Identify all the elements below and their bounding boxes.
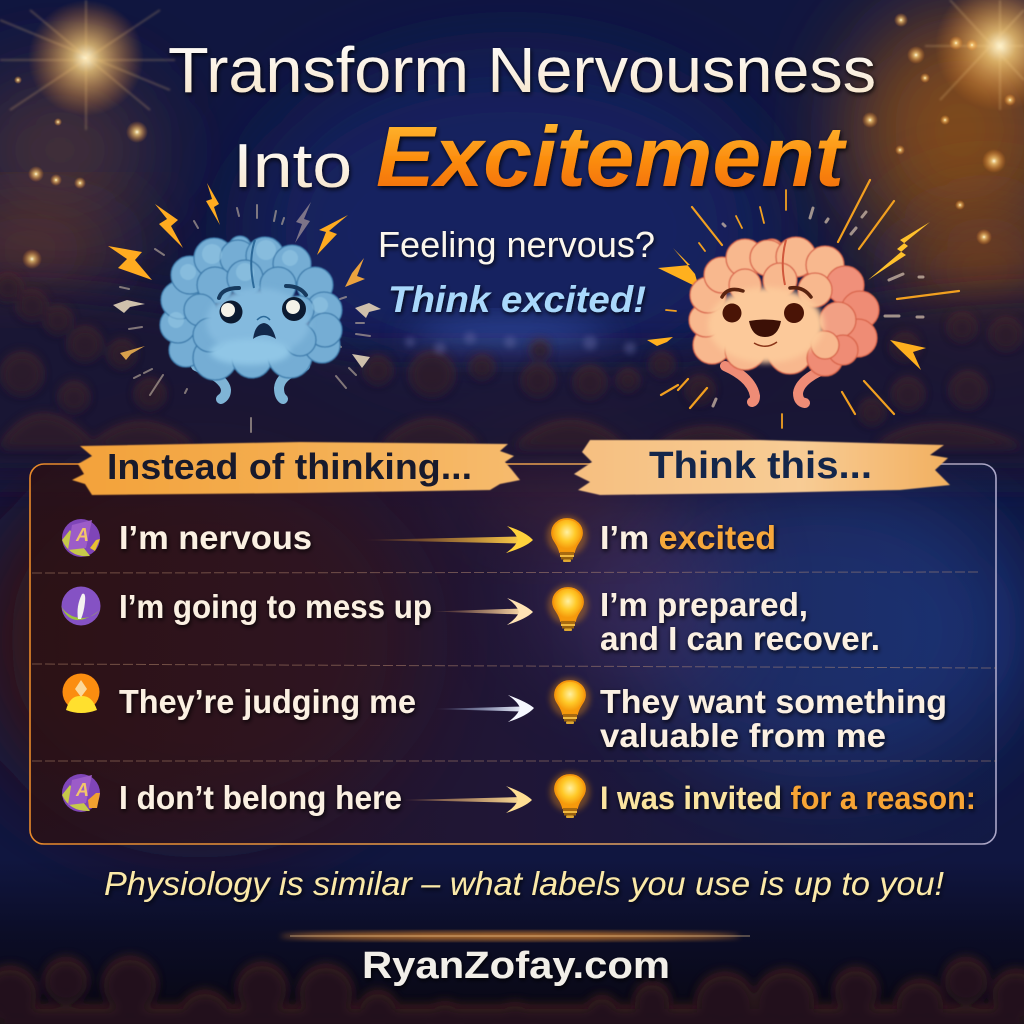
icon: nervous blue brain	[108, 183, 381, 432]
icon: bulb	[548, 585, 588, 631]
title	[168, 34, 876, 205]
icon: bulb	[550, 772, 590, 818]
icon: bulb	[547, 516, 587, 562]
crowd: bottom	[0, 956, 1024, 1024]
row 4	[62, 772, 976, 818]
icon: purple badge	[62, 519, 100, 557]
brain lobes	[689, 237, 879, 376]
brain legs	[196, 366, 305, 399]
tagline: Physiology is similar – what labels you use is up to you!	[104, 865, 944, 902]
icon: purple badge: A	[75, 780, 89, 800]
arrow	[404, 786, 532, 813]
spotlights and sparkles	[0, 0, 1024, 269]
crowd: behind panel	[0, 272, 1024, 480]
banner: instead of thinking: Instead of thinking...	[107, 446, 472, 487]
row 1: I’m nervous	[119, 519, 312, 556]
banner: think this: Think this...	[649, 445, 872, 487]
row 3: They’re judging me	[119, 683, 416, 720]
row 3	[62, 674, 947, 754]
subheading: Think excited!	[388, 279, 646, 320]
row 3: valuable from me	[600, 717, 886, 754]
row 2: and I can recover.	[600, 620, 880, 657]
row 2: I’m prepared,	[600, 586, 808, 623]
row 3: They want something	[600, 683, 947, 720]
title: Excitement	[376, 110, 848, 205]
subheading: Feeling nervous?	[378, 224, 655, 265]
row 2: I’m going to mess up	[119, 588, 432, 625]
icon: orange person	[62, 674, 100, 713]
row 4: I don’t belong here	[119, 779, 402, 816]
arrow	[360, 526, 533, 553]
banner: think this	[574, 440, 950, 495]
row 1	[62, 516, 776, 562]
glow divider	[280, 932, 750, 940]
panel: thought swaps	[30, 440, 996, 844]
row 1: I’m excited	[600, 519, 776, 556]
title: Into	[233, 132, 352, 201]
website: RyanZofay.com	[362, 945, 670, 987]
brain lobes	[160, 236, 342, 380]
arrow	[432, 598, 533, 625]
brain face	[708, 287, 824, 363]
row 2	[61, 585, 880, 657]
arrow	[432, 695, 534, 722]
row 4: I was invited for a reason:	[600, 780, 976, 816]
icon: purple badge: A	[75, 525, 89, 545]
icon: excited orange brain	[647, 180, 959, 428]
banner: instead of thinking	[72, 442, 520, 495]
brain legs	[725, 366, 832, 403]
icon: purple badge	[61, 586, 100, 626]
icon: bulb	[550, 678, 590, 724]
subheading	[378, 224, 655, 320]
icon: purple badge	[62, 774, 100, 812]
brain face	[206, 288, 310, 356]
title: Transform Nervousness	[168, 34, 876, 106]
